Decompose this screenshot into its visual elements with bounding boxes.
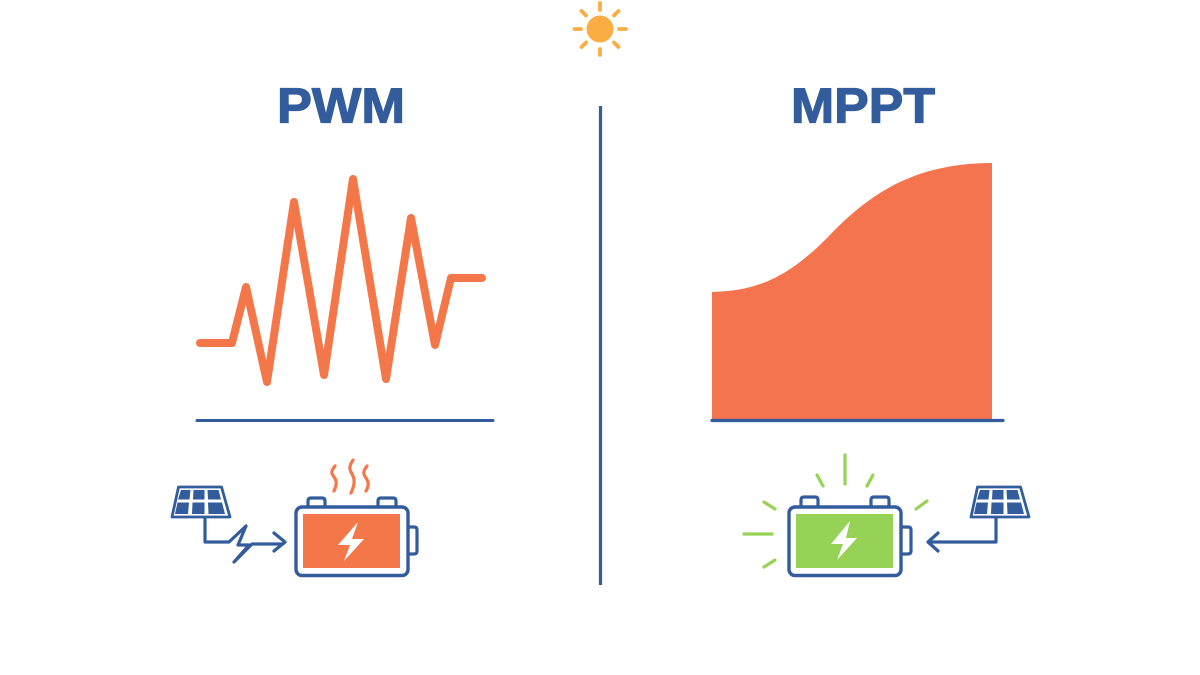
glow rays [744, 455, 927, 567]
icon: MPPT solar panel and clean arrow [928, 487, 1029, 551]
chart: PWM jagged waveform [197, 179, 493, 420]
icon: overheating battery [296, 460, 417, 576]
center divider [599, 106, 602, 585]
heat waves [332, 460, 368, 493]
heading: MPPT: MPPT [791, 80, 935, 134]
icon: sun [574, 3, 626, 55]
icon: healthy green battery [744, 455, 927, 576]
icon: PWM solar panel and noisy connection [172, 487, 285, 562]
heading: PWM: PWM [277, 80, 405, 134]
chart: MPPT smooth area curve [712, 163, 1003, 420]
